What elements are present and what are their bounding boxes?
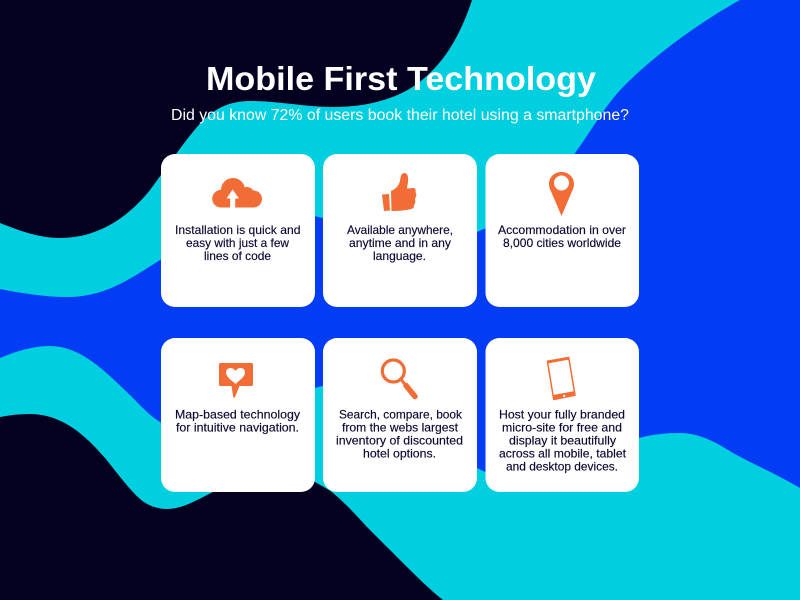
background: top navy wave [0, 0, 472, 238]
icon: thumbs up [382, 173, 416, 211]
text: navigation [175, 408, 300, 434]
icon: smartphone [547, 357, 576, 400]
text: micro-site: micro-site for free and [502, 420, 622, 434]
text: micro-site: and desktop devices. [506, 460, 618, 474]
panel: micro-site [486, 338, 639, 492]
icon: heart speech bubble [219, 363, 253, 398]
text: navigation: Map-based technology [175, 408, 300, 422]
text: search [336, 408, 463, 460]
panel: availability [323, 154, 477, 307]
text: installation: Installation is quick and [175, 223, 300, 237]
icon: map pin [549, 172, 574, 216]
panel: navigation [161, 338, 315, 492]
text: availability: language. [373, 249, 426, 263]
text: availability: anytime and in any [349, 236, 451, 250]
text: navigation: for intuitive navigation. [176, 420, 299, 434]
text: accommodation: Accommodation in over [498, 223, 626, 237]
text: accommodation: 8,000 cities worldwide [503, 236, 621, 250]
text: availability: Available anywhere, [347, 223, 453, 237]
text: micro-site: Host your fully branded [499, 408, 625, 422]
icon: cloud upload [212, 178, 262, 208]
background: bottom cyan wave [0, 346, 800, 600]
text: search: hotel options. [363, 446, 436, 460]
text: installation: lines of code [204, 249, 271, 263]
title: Mobile First Technology [206, 60, 597, 97]
text: search: Search, compare, book [339, 408, 463, 422]
background: bottom navy wave [0, 414, 443, 600]
panel: installation [161, 154, 315, 307]
icon: magnifying glass [382, 360, 415, 396]
panel: accommodation [486, 154, 639, 307]
text: availability [347, 223, 453, 263]
text: installation: easy with just a few [186, 236, 289, 250]
text: search: inventory of discounted [336, 434, 463, 448]
text: micro-site: display it beautifully [509, 434, 616, 448]
panel: search [323, 338, 477, 492]
text: micro-site [499, 408, 627, 474]
text: accommodation [498, 223, 626, 250]
background: top cyan wave [0, 0, 740, 297]
subtitle: Did you know 72% of users book their hotel using a smartphone? [171, 107, 629, 124]
text: micro-site: across all mobile, tablet [499, 446, 627, 460]
text: search: from the webs largest [342, 420, 459, 434]
text: installation [175, 223, 300, 263]
